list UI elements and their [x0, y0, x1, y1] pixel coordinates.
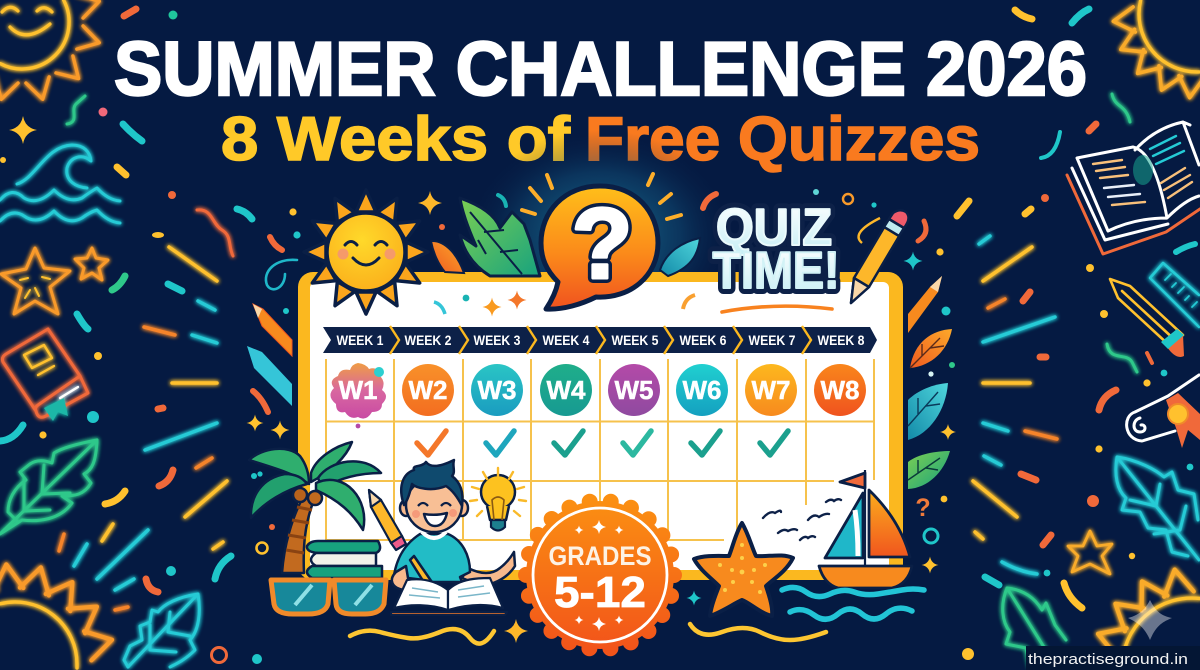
week header bar: WEEK 2: [404, 332, 452, 348]
week header bar: WEEK 5: [612, 332, 659, 348]
left dots and sparkles: [0, 10, 301, 664]
quiz time sign: TIME!: [712, 242, 840, 300]
confetti on calendar: [434, 290, 695, 316]
underline under quiz time: [722, 306, 832, 312]
starfish: [694, 523, 793, 616]
open book with boy: [391, 578, 507, 615]
leaf green behind bubble: [460, 198, 540, 276]
week badge W3: W3: [478, 375, 516, 405]
subtitle: [221, 105, 980, 174]
icon: neon wave: [0, 145, 120, 223]
leaf green right: [908, 451, 950, 489]
quiz time sign: TIME!: [712, 242, 840, 300]
icon: neon sun bottom right: [1093, 567, 1200, 668]
week header bar: WEEK 1: [336, 332, 384, 348]
icon: question mark small: ?: [915, 494, 931, 522]
week badge W8: [814, 364, 866, 416]
floating shapes around header: [418, 189, 880, 243]
glow behind question bubble: [465, 130, 735, 340]
leaf teal right: [908, 383, 948, 440]
week header bar: WEEK 8: [818, 332, 865, 348]
icon: neon pencil: [1110, 279, 1184, 357]
icon: neon green leaf bottom: [1003, 588, 1066, 667]
week header bar: [323, 326, 877, 354]
yellow squiggle right: [690, 624, 826, 640]
left confetti and rays: [59, 96, 233, 610]
week badge W4: [540, 364, 592, 416]
small sparkles bottom: [257, 471, 702, 643]
watermark: [1026, 646, 1200, 670]
sunglasses: [271, 580, 386, 614]
right confetti and rays: [973, 94, 1137, 574]
icon: neon ruler: [1150, 263, 1199, 327]
grades badge: [526, 501, 674, 649]
speech bubble with question mark: ?: [571, 188, 633, 300]
calendar frame: [298, 272, 903, 580]
week badge W7: [745, 364, 797, 416]
week badge W6: [676, 364, 728, 416]
leaf teal small: [660, 238, 700, 276]
palm tree: [249, 442, 381, 573]
icon: neon diploma scroll: [1127, 375, 1200, 448]
week badge W6: W6: [682, 375, 722, 405]
watermark star: [1128, 600, 1172, 640]
week badge W2: [402, 364, 454, 416]
yellow squiggle left: [350, 629, 494, 644]
icon: neon green leaf: [0, 440, 97, 534]
pencil by quiz time: [851, 210, 909, 303]
week header bar: WEEK 7: [748, 332, 796, 348]
birds: [763, 499, 841, 540]
week badge W5: [608, 364, 660, 416]
smiling sun: [304, 190, 428, 314]
quiz time sign: QUIZ: [716, 199, 832, 257]
stack of books: [307, 541, 382, 578]
right confetti pieces: [918, 9, 1195, 608]
week header bar: WEEK 4: [542, 332, 590, 348]
centre side decorations beside calendar: [247, 276, 942, 406]
week badge W4: W4: [546, 375, 586, 405]
pencil behind boy: [369, 490, 406, 550]
grades badge: GRADES: [548, 541, 652, 571]
water waves under boat: [782, 587, 924, 619]
icon: neon sun bottom left: [0, 563, 116, 668]
icon: neon book: [2, 329, 88, 421]
check marks row: [417, 431, 788, 455]
quiz time sign: QUIZ: [716, 199, 832, 257]
week badge W1 splash: W1: [338, 375, 378, 405]
left confetti pieces: [0, 9, 297, 592]
icon: neon smiling sun top left: [0, 0, 102, 102]
title: SUMMER CHALLENGE 2026: [114, 27, 1087, 112]
icon: neon star bottom right: [1068, 531, 1112, 574]
sailboat: [819, 470, 912, 588]
week badge W2: W2: [408, 375, 448, 405]
icon: neon teal leaf right: [1116, 457, 1199, 560]
week badge W7: W7: [752, 375, 790, 405]
speech bubble with question mark: [541, 186, 658, 309]
watermark: thepractiseground.in: [1028, 651, 1188, 668]
speech bubble with question mark: ?: [571, 188, 633, 300]
icon: neon teal leaf bottom left: [124, 594, 199, 667]
icon: neon starfish: [1, 248, 108, 314]
week badge W1 splash: [330, 363, 386, 428]
quiz time sign: [712, 199, 840, 300]
subtitle: Free Quizzes: [585, 105, 980, 174]
week badge W8: W8: [820, 375, 860, 405]
week badge W5: W5: [614, 375, 654, 405]
icon: neon open book top right: [1067, 122, 1200, 254]
light bulb: [470, 468, 526, 530]
leaf orange small: [431, 241, 464, 273]
calendar grid: [326, 359, 874, 540]
subtitle: 8 Weeks of: [221, 105, 570, 174]
icon: neon sun top right: [1112, 0, 1200, 99]
week header bar: WEEK 6: [680, 332, 727, 348]
boy character: [392, 460, 515, 592]
grades badge: 5-12: [554, 568, 646, 617]
right dots and sparkles: [904, 194, 1193, 660]
week header bar: WEEK 3: [474, 332, 521, 348]
leaf orange right: [910, 329, 952, 368]
sparks around bubble: [498, 174, 716, 219]
week badge W3: [471, 364, 523, 416]
